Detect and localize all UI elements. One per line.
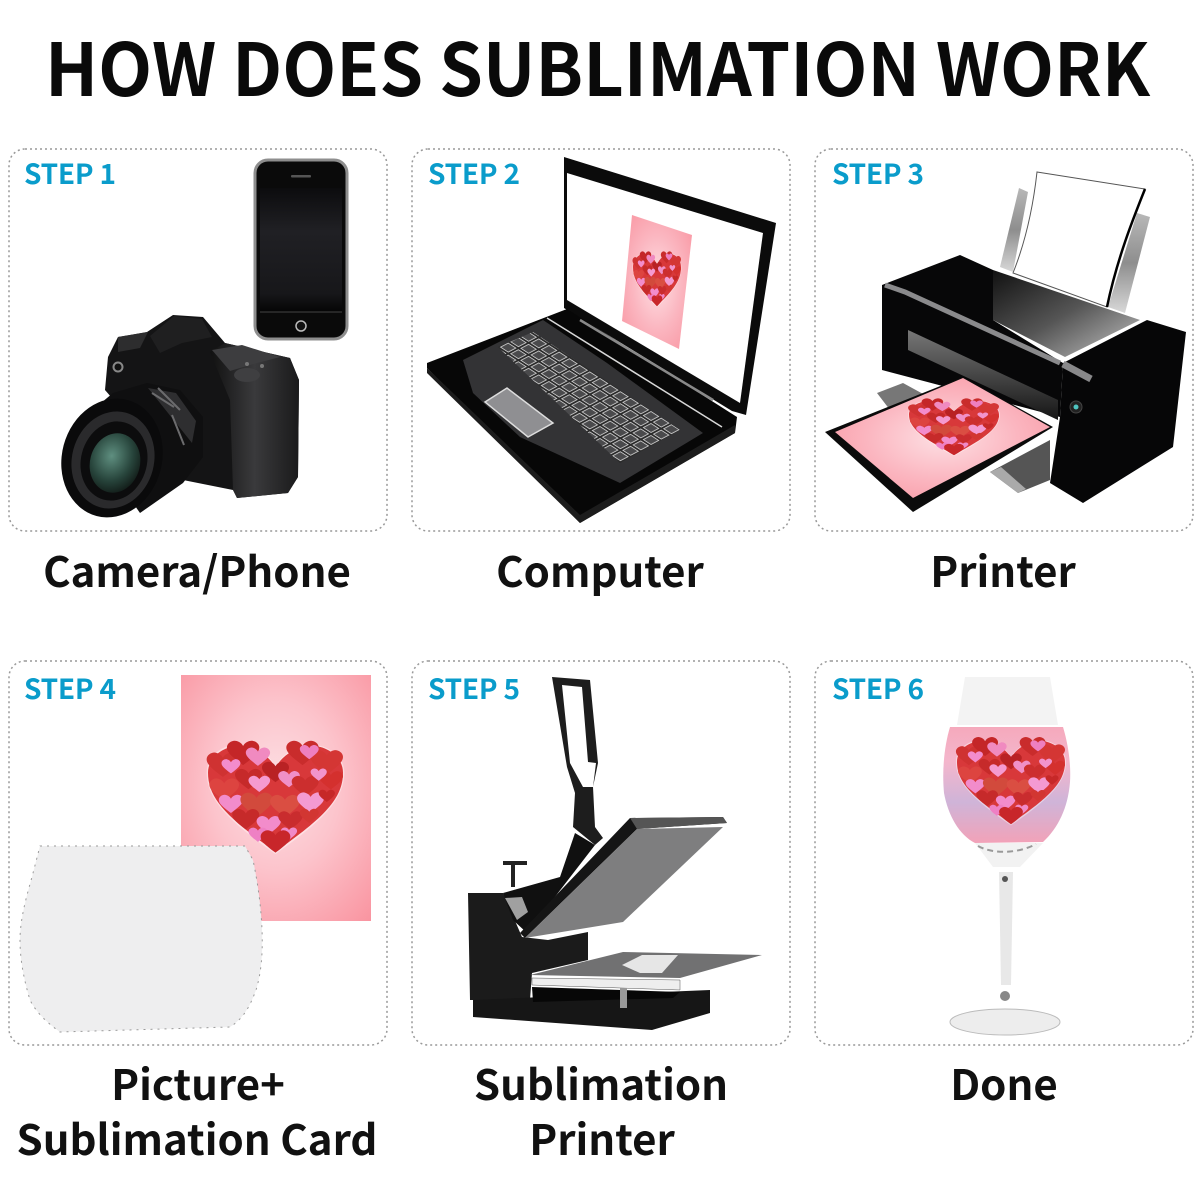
panel: step 6 wine glass <box>815 661 1193 1045</box>
label: sublimation printer: Printer <box>529 1107 675 1168</box>
title: HOW DOES SUBLIMATION WORK <box>45 12 1151 118</box>
step 5 label: STEP 5 <box>428 668 520 708</box>
icon: heat press <box>468 677 762 1030</box>
step 1 label: STEP 1 <box>24 153 116 193</box>
label: printer: Printer <box>930 539 1076 600</box>
step 2 label: STEP 2 <box>428 153 520 193</box>
label: picture + sublimation card <box>17 1052 377 1168</box>
sublimation card blank <box>20 846 262 1032</box>
panel: step 5 heat press <box>412 661 790 1045</box>
panel: step 2 computer <box>412 149 790 531</box>
label: sublimation printer: Sublimation <box>474 1052 728 1113</box>
step 3 label: STEP 3 <box>832 153 924 193</box>
icon: wine glass <box>943 677 1070 1035</box>
panel: step 4 picture and card <box>9 661 387 1045</box>
icon: phone <box>255 160 347 339</box>
label: computer: Computer <box>496 539 705 600</box>
icon: laptop <box>427 157 776 523</box>
label: picture + sublimation card: Sublimation Card <box>17 1107 377 1168</box>
label: done: Done <box>950 1052 1058 1113</box>
label: camera/phone: Camera/Phone <box>43 539 351 600</box>
label: picture + sublimation card: Picture+ <box>111 1052 285 1113</box>
step 4 label: STEP 4 <box>24 668 116 708</box>
icon: camera <box>48 315 299 529</box>
label: sublimation printer <box>474 1052 728 1168</box>
panel: step 1 camera and phone <box>9 149 387 531</box>
step 6 label: STEP 6 <box>832 668 924 708</box>
panel: step 3 printer <box>815 149 1193 531</box>
pink picture <box>181 675 371 921</box>
icon: printer <box>825 172 1186 512</box>
